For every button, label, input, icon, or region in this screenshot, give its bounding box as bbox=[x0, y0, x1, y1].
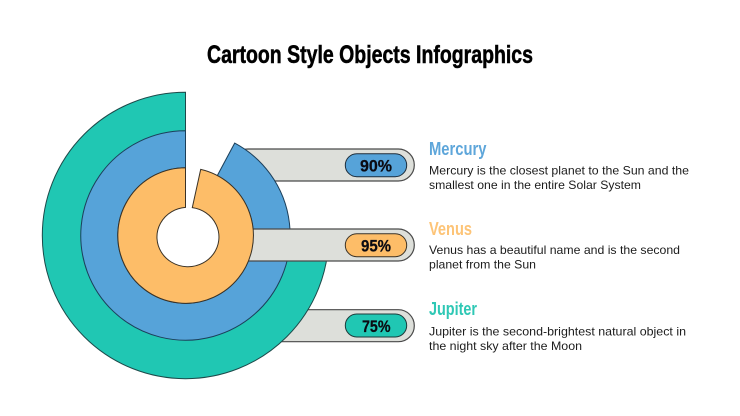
pill: Mercury 90%: 90% bbox=[360, 156, 392, 176]
title: Cartoon Style Objects Infographics bbox=[207, 41, 533, 69]
ring: Jupiter 75% bbox=[42, 92, 329, 379]
text block: Mercury: smallest one in the entire Solar System bbox=[429, 178, 641, 192]
text block: Jupiter: the night sky after the Moon bbox=[429, 339, 582, 353]
text block: Venus: Venus has a beautiful name and is the second bbox=[429, 243, 680, 257]
connector bar: Mercury bbox=[232, 149, 414, 181]
connector bar: Jupiter bbox=[250, 310, 414, 342]
ring: Venus 95% bbox=[118, 168, 253, 303]
pill: Jupiter 75% bbox=[345, 314, 407, 337]
text block: Mercury: Mercury bbox=[429, 139, 486, 159]
pill: Jupiter 75%: 75% bbox=[362, 317, 390, 336]
text block: Jupiter bbox=[429, 299, 686, 353]
pill: Venus 95%: 95% bbox=[361, 236, 391, 256]
text block: Jupiter: Jupiter bbox=[429, 299, 477, 319]
text block: Venus: planet from the Sun bbox=[429, 258, 536, 272]
ring: Mercury 90% bbox=[81, 131, 290, 340]
text block: Mercury: Mercury is the closest planet to the Sun and the bbox=[429, 163, 689, 177]
text block: Mercury bbox=[429, 139, 689, 192]
pill: Venus 95% bbox=[345, 234, 407, 257]
connector bar: Venus bbox=[230, 229, 414, 261]
text block: Venus: Venus bbox=[429, 219, 472, 239]
text block: Jupiter: Jupiter is the second-brightest natural object in bbox=[429, 324, 686, 338]
pill: Mercury 90% bbox=[345, 154, 407, 177]
text block: Venus bbox=[429, 219, 680, 272]
